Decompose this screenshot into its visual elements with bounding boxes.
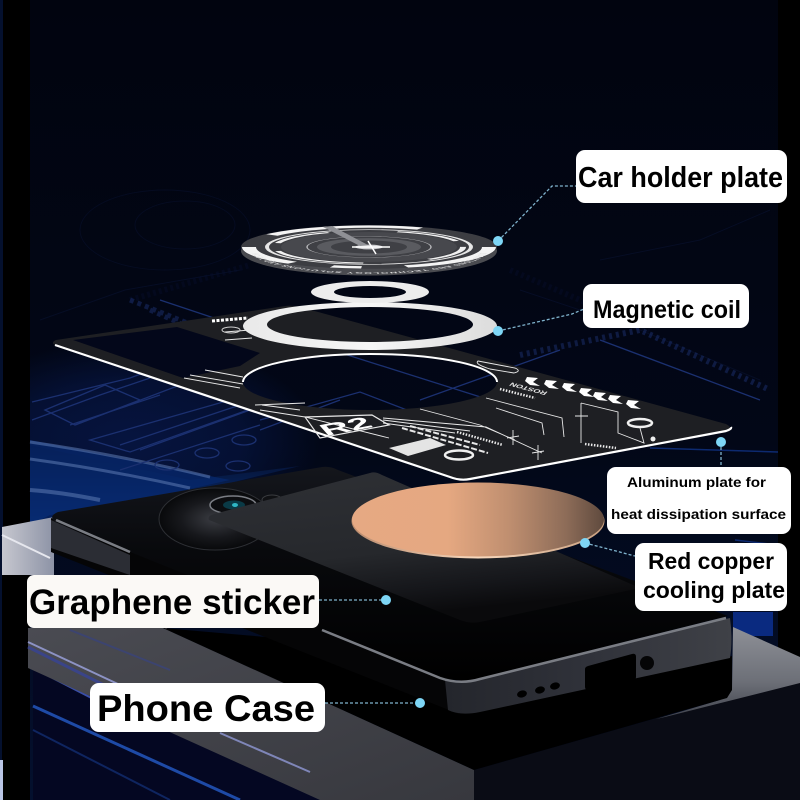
connector: car holder plate xyxy=(498,186,576,241)
graphene sticker sheet xyxy=(209,472,640,623)
circuit traces xyxy=(184,330,644,460)
hole highlight xyxy=(243,354,497,382)
background: faint circuit pattern xyxy=(40,190,770,380)
small ring upper left xyxy=(222,327,240,333)
connector: graphene sticker xyxy=(319,599,386,601)
phone left side face xyxy=(51,518,459,714)
label: aluminum plate: Aluminum plate for xyxy=(627,474,767,490)
label: car holder plate xyxy=(576,150,787,203)
connector: magnetic coil xyxy=(498,309,584,331)
dot: phone case xyxy=(415,698,425,708)
plate highlights xyxy=(323,226,368,246)
label: graphene sticker: Graphene sticker xyxy=(29,583,315,622)
phone top face xyxy=(52,467,728,681)
camera module xyxy=(159,488,282,550)
small coil ring xyxy=(311,281,429,303)
stripes upper left xyxy=(212,318,248,321)
dot: magnetic coil xyxy=(493,326,503,336)
large coil ring xyxy=(243,302,497,350)
small plate ring xyxy=(445,450,473,460)
aluminum plate xyxy=(53,306,731,480)
grey platform surface xyxy=(28,628,474,800)
phone metal rim xyxy=(56,520,726,682)
black phone reflection xyxy=(163,628,732,770)
background: blue circuit grid and light streaks xyxy=(30,300,778,636)
light reflection beside phone xyxy=(656,627,800,719)
speaker holes xyxy=(516,681,561,699)
light platform, upper left xyxy=(2,517,54,575)
connector: phone case xyxy=(325,702,420,704)
label: phone case: Phone Case xyxy=(97,688,315,729)
label: red copper cooling plate xyxy=(635,543,787,611)
plate disc with concentric rings xyxy=(241,225,497,269)
white stripe block xyxy=(389,438,446,456)
dark block, right foreground xyxy=(474,683,800,800)
plate window xyxy=(73,327,260,378)
plate body xyxy=(53,306,730,480)
label: magnetic coil: Magnetic coil xyxy=(593,296,741,324)
black column at left xyxy=(2,575,30,760)
callout dots xyxy=(381,236,726,708)
label: red copper cooling plate: Red copper xyxy=(648,548,774,574)
dark blue floor with streaks xyxy=(33,668,320,800)
label connectors xyxy=(319,186,721,703)
screw ring xyxy=(628,419,652,427)
dot: aluminum plate xyxy=(716,437,726,447)
car holder plate xyxy=(241,225,497,276)
label: car holder plate: Car holder plate xyxy=(578,162,783,194)
reversed rim text: SOLUTIONS AND TECHNOLOGY SOLUTIONS AND TECH xyxy=(252,253,486,274)
magnetic coil rings xyxy=(243,281,497,350)
dot: car holder plate xyxy=(493,236,503,246)
chevrons xyxy=(525,377,641,409)
label: magnetic coil xyxy=(583,284,749,328)
dot xyxy=(650,436,656,442)
plate edge highlight xyxy=(55,345,731,480)
label: aluminum plate: heat dissipation surface xyxy=(611,506,786,522)
phone case body xyxy=(51,467,732,714)
dot: red copper plate xyxy=(580,538,590,548)
dot: graphene sticker xyxy=(381,595,391,605)
connector: red copper plate xyxy=(585,543,635,556)
plate logo: R2: R2 xyxy=(315,414,378,440)
connector: aluminum plate xyxy=(720,442,722,467)
phone bottom side face xyxy=(445,618,732,714)
label: aluminum plate xyxy=(607,467,791,534)
plate thickness xyxy=(241,226,497,276)
red copper cooling plate xyxy=(352,482,604,558)
label: red copper cooling plate: cooling plate xyxy=(643,577,785,603)
charging port xyxy=(585,654,636,690)
small plate text: ROSTON xyxy=(507,381,549,396)
microphone hole xyxy=(640,656,654,670)
